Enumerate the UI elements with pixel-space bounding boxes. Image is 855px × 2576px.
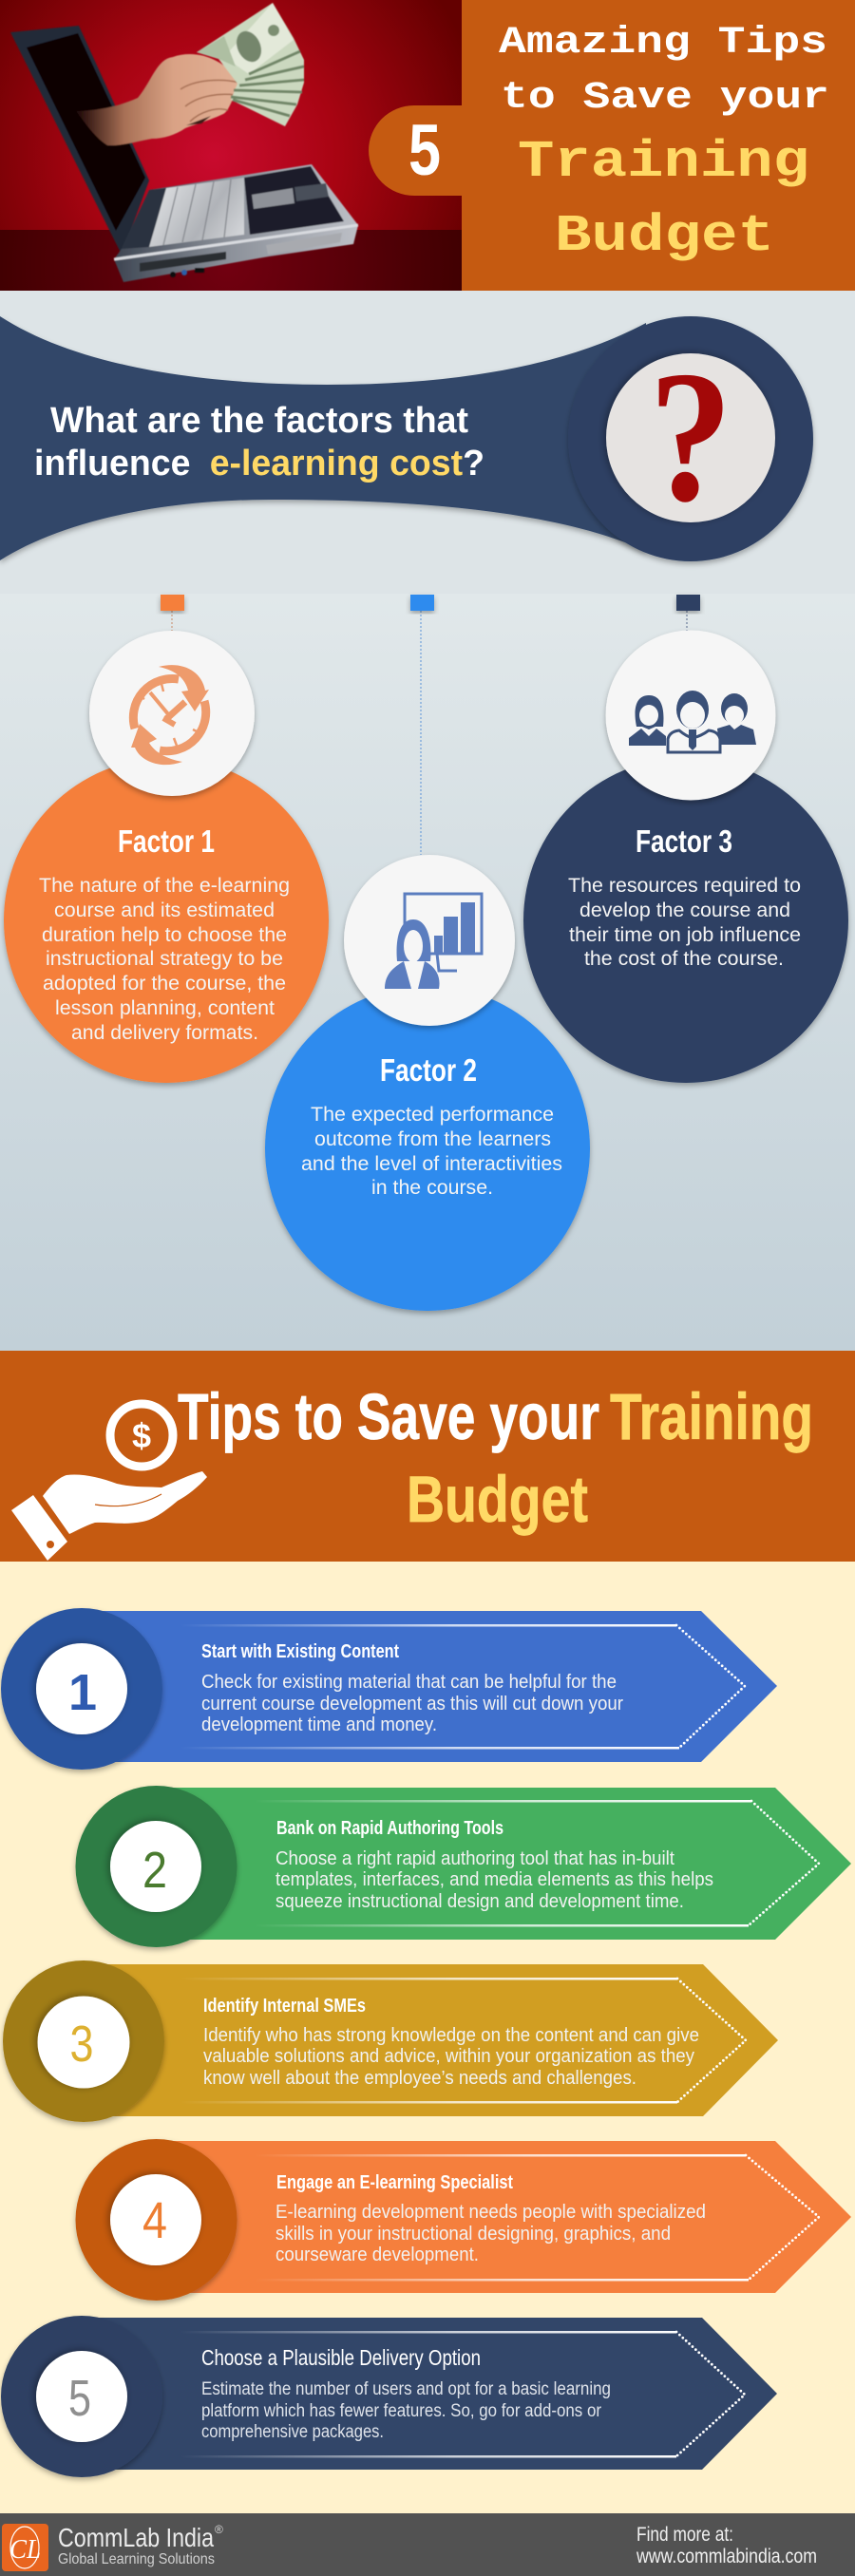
tip 1 xyxy=(1,1608,777,1770)
hanging tags xyxy=(161,595,700,855)
tips banner: Budget xyxy=(407,1463,588,1536)
logo: CL xyxy=(10,2535,41,2565)
tip 2: templates, interfaces, and media elements as this helps xyxy=(276,1868,713,1890)
fan of banknotes xyxy=(197,3,304,126)
title panel: Budget xyxy=(555,206,774,266)
number 3: 3 xyxy=(70,2016,93,2073)
factor 2 xyxy=(265,855,590,1311)
factor 3: develop the course and xyxy=(580,899,790,921)
title lines: Amazing Tips xyxy=(499,22,827,65)
tip 4: skills in your instructional designing, graphics, and xyxy=(276,2223,671,2245)
factor 2 text: Factor 2 xyxy=(380,1052,477,1088)
laptop lid xyxy=(10,26,149,255)
tips banner xyxy=(0,1351,855,1562)
tip 1: current course development as this will cut down your xyxy=(201,1693,623,1714)
factor 2: outcome from the learners xyxy=(314,1127,551,1150)
factor 1: adopted for the course, the xyxy=(43,972,286,994)
footer: www.commlabindia.com xyxy=(636,2546,817,2567)
tip 2: Choose a right rapid authoring tool that has in-built xyxy=(276,1847,674,1869)
factor 3: their time on job influence xyxy=(569,923,801,946)
tip 4 text: Engage an E-learning Specialist xyxy=(276,2172,513,2193)
tip 4: courseware development. xyxy=(276,2244,479,2265)
tip 4: E-learning development needs people with specialized xyxy=(276,2201,706,2223)
tip 2 xyxy=(76,1786,851,1947)
tip 5: platform which has fewer features. So, go for add-ons or xyxy=(201,2401,602,2421)
laptop base xyxy=(114,164,358,282)
factor 2: and the level of interactivities xyxy=(301,1152,562,1175)
icon: clock with cycle arrows xyxy=(131,665,209,765)
tip 4 xyxy=(76,2139,851,2301)
ports xyxy=(140,252,226,272)
tip 3: know well about the employee’s needs and challenges. xyxy=(203,2067,636,2089)
factor 1 text: Factor 1 xyxy=(118,824,215,859)
tip 1: development time and money. xyxy=(201,1714,437,1735)
laptop screen xyxy=(27,33,145,231)
touchpad xyxy=(252,188,294,209)
tip 5: comprehensive packages. xyxy=(201,2422,384,2442)
number 4: 4 xyxy=(142,2192,167,2249)
tip 1: Check for existing material that can be helpful for the xyxy=(201,1671,617,1693)
factor 1: lesson planning, content xyxy=(55,996,275,1019)
question banner: influence e-learning cost? xyxy=(34,444,484,483)
tips banner: $ xyxy=(132,1416,151,1455)
tip 3: valuable solutions and advice, within your organization as they xyxy=(203,2045,695,2067)
tip 3 text: Identify Internal SMEs xyxy=(203,1996,366,2017)
logo xyxy=(2,2524,48,2571)
website: Find more at: xyxy=(636,2524,733,2546)
factor 3: The resources required to xyxy=(568,874,801,897)
title panel: Training xyxy=(518,132,809,192)
tip 3: Identify who has strong knowledge on the content and can give xyxy=(203,2024,699,2046)
factor 1: duration help to choose the xyxy=(42,923,287,946)
title panel xyxy=(369,0,855,291)
factor 3: the cost of the course. xyxy=(584,947,784,970)
brand name: CommLab India xyxy=(58,2523,214,2552)
factor 1: instructional strategy to be xyxy=(46,947,283,970)
question text: What are the factors that xyxy=(50,401,468,441)
keyboard xyxy=(149,178,244,247)
factor 1 xyxy=(4,631,329,1083)
number 5: 5 xyxy=(68,2370,91,2427)
big five: 5 xyxy=(408,110,441,191)
icon: open hand xyxy=(11,1471,207,1561)
tip 3 xyxy=(3,1960,778,2122)
factor 3 xyxy=(523,631,848,1083)
question mark: ? xyxy=(649,332,732,540)
tip 5 xyxy=(1,2316,777,2477)
factor 2: The expected performance xyxy=(311,1103,554,1126)
icon: coin xyxy=(110,1404,173,1467)
factor 1: The nature of the e-learning xyxy=(39,874,290,897)
factor 3 text: Factor 3 xyxy=(636,824,732,859)
icon: three people xyxy=(629,691,756,752)
number 2: 2 xyxy=(142,1842,167,1899)
arm xyxy=(76,54,239,145)
factor 1: course and its estimated xyxy=(54,899,275,921)
tagline: Global Learning Solutions xyxy=(58,2551,215,2567)
tip 5: Estimate the number of users and opt for a basic learning xyxy=(201,2379,611,2399)
hero photo: laptop with hand holding money xyxy=(0,0,462,291)
number 1: 1 xyxy=(68,1664,97,1721)
title panel: to Save your xyxy=(501,77,829,120)
question banner xyxy=(0,316,813,561)
tip 2 text: Bank on Rapid Authoring Tools xyxy=(276,1818,504,1839)
icon: presenter with bar chart xyxy=(385,894,482,989)
tip 2: squeeze instructional design and development time. xyxy=(276,1890,684,1912)
tips heading: Tips to Save your xyxy=(178,1380,599,1453)
number tab xyxy=(369,105,462,196)
factor 1: and delivery formats. xyxy=(71,1021,258,1044)
tip 5 text: Choose a Plausible Delivery Option xyxy=(201,2345,481,2370)
factor 2: in the course. xyxy=(371,1176,493,1199)
question ring xyxy=(568,316,813,561)
tip 1 text: Start with Existing Content xyxy=(201,1641,399,1662)
footer xyxy=(0,2513,855,2576)
footer: ® xyxy=(215,2523,223,2536)
